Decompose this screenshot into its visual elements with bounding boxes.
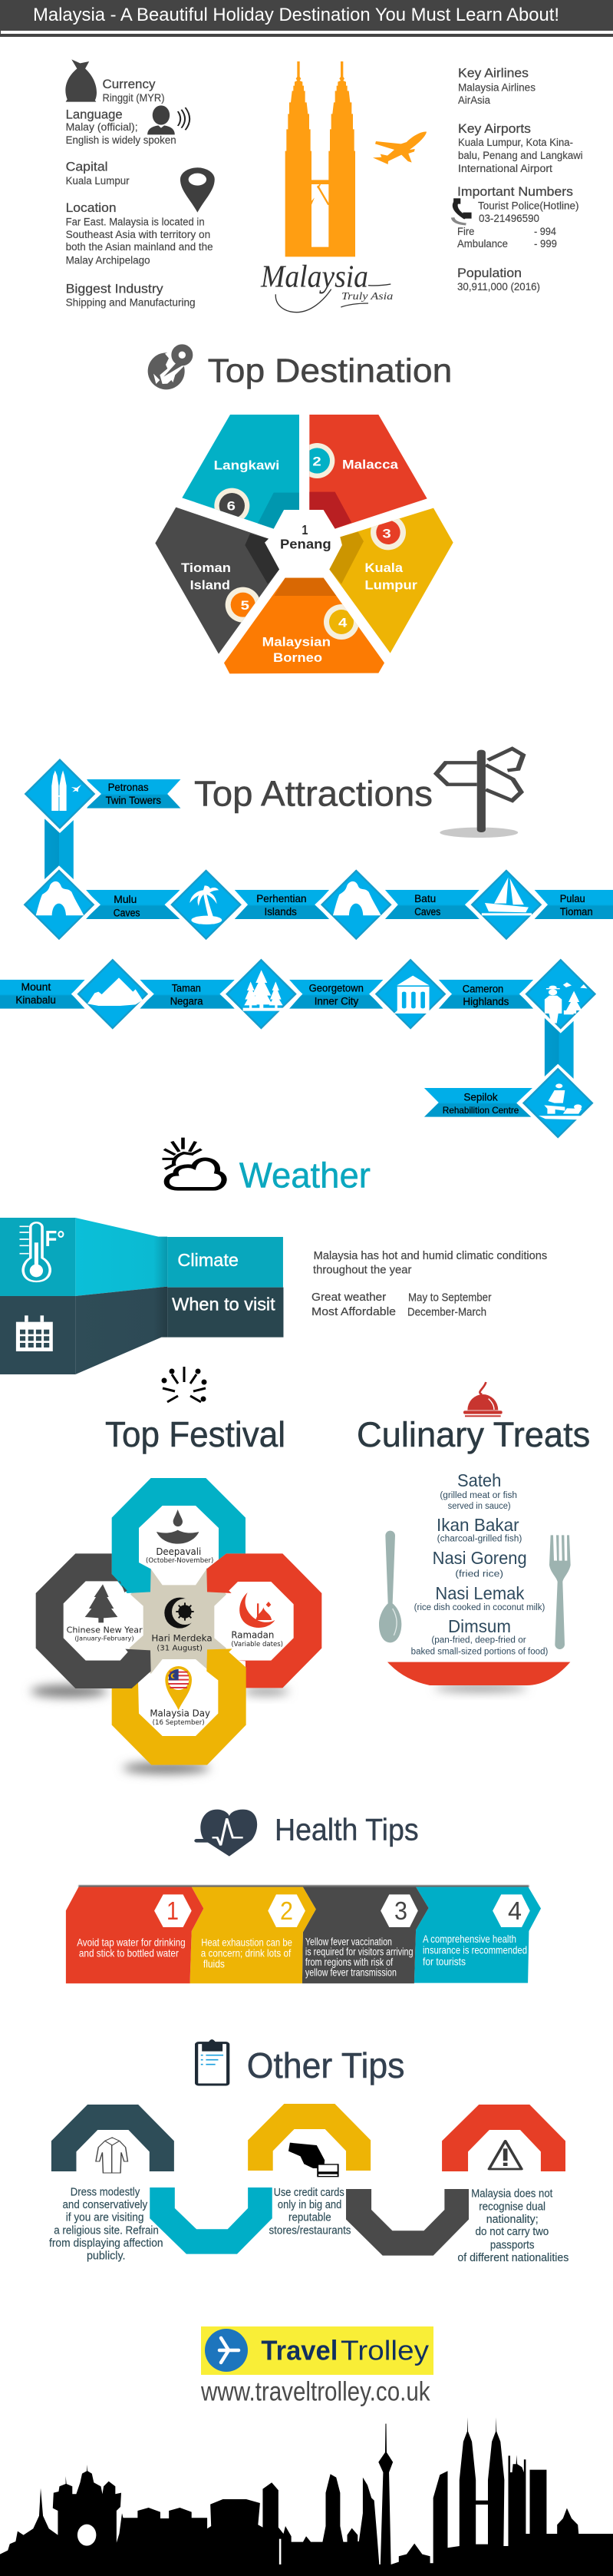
other tip text 3: passports <box>490 2239 534 2251</box>
segment: Langkawi: 6 <box>227 498 236 513</box>
timeline labels row 2: Taman <box>172 982 201 994</box>
timeline labels row 2: Highlands <box>463 996 509 1007</box>
other tip text 2: only in big and <box>278 2199 341 2211</box>
list of dishes: Dimsum <box>448 1616 511 1636</box>
population <box>457 266 540 293</box>
other tip text 2 <box>269 2187 351 2237</box>
segment: Penang centre: Penang <box>280 536 331 551</box>
weather panel labels: Climate <box>177 1250 239 1270</box>
key airports: International Airport <box>458 163 552 174</box>
list of dishes: Ikan Bakar <box>437 1515 519 1535</box>
festival labels: Chinese New Year <box>67 1625 143 1635</box>
health tip text 1: Avoid tap water for drinking <box>77 1936 186 1948</box>
icon: heart with pulse <box>196 1810 257 1857</box>
list of dishes: baked small-sized portions of food) <box>411 1646 548 1657</box>
timeline labels row 2: Rehabilition Centre <box>443 1105 519 1116</box>
u-shape: dark <box>346 2189 469 2256</box>
icon: crescent and star <box>164 1598 198 1629</box>
language <box>66 107 176 146</box>
title: Malaysia - A Beautiful Holiday Destination You Must Learn About! <box>33 5 559 25</box>
capital: Capital <box>66 160 108 174</box>
population: Population <box>457 266 522 280</box>
icon: telephone <box>453 198 472 224</box>
heading: Top Destination <box>208 352 452 389</box>
other tip text 2: reputable <box>288 2212 331 2224</box>
heading: top festival: Top Festival <box>105 1414 285 1454</box>
health tips heading: Health Tips <box>275 1814 419 1847</box>
health tips numbers: 3 <box>394 1896 407 1925</box>
other tip text 1: Dress modestly <box>71 2186 140 2198</box>
weather description text: Most Affordable <box>311 1306 396 1318</box>
weather description text: Malaysia has hot and humid climatic conditions <box>314 1250 547 1262</box>
biggest industry: Shipping and Manufacturing <box>66 296 196 308</box>
diamond: Georgetown Inner City <box>369 955 452 1033</box>
skyline silhouette <box>0 2417 613 2576</box>
health tip text 3 <box>305 1936 413 1978</box>
icon: plane in circle <box>205 2329 248 2372</box>
timeline labels row 2: Cameron <box>463 983 503 994</box>
icon: spoon <box>379 1531 401 1642</box>
travel trolley logo <box>201 2326 433 2375</box>
segment: Malacca <box>299 415 427 529</box>
timeline labels row 1: Batu <box>414 893 436 904</box>
key airlines: Malaysia Airlines <box>458 81 536 93</box>
list of dishes: (fried rice) <box>455 1568 503 1579</box>
weather panel labels: When to visit <box>172 1295 275 1314</box>
segment: Malaysian Borneo <box>224 578 384 673</box>
diamond: Petronas Twin Towers <box>18 755 101 833</box>
icon: money bag <box>65 59 97 102</box>
important numbers: Fire <box>457 226 474 237</box>
segment: Tioman Island <box>155 508 279 654</box>
segment: Tioman Island: 5 <box>241 598 249 613</box>
health tips numbers: 2 <box>280 1896 293 1925</box>
timeline labels row 1: Petronas <box>108 782 149 793</box>
list of dishes: (grilled meat or fish <box>440 1490 517 1500</box>
festival labels <box>67 1546 283 1727</box>
capital <box>66 160 130 187</box>
timeline: attraction route shapes <box>18 755 613 944</box>
icon: pin with malaysian flag <box>165 1666 192 1710</box>
timeline labels row 1 <box>106 782 593 918</box>
health tip text 4: A comprehensive health <box>423 1933 516 1945</box>
red bowl <box>387 1662 570 1685</box>
segment: Langkawi <box>182 415 299 529</box>
malaysia truly asia logo: Truly Asia <box>341 290 394 302</box>
other tip text 2: stores/restaurants <box>269 2224 351 2237</box>
diamond: Taman Negara <box>219 955 302 1033</box>
segment: Penang centre <box>280 522 331 551</box>
language: English is widely spoken <box>66 134 176 146</box>
list of dishes: (charcoal-grilled fish) <box>437 1533 522 1544</box>
timeline labels row 2: Mount <box>21 981 51 993</box>
timeline labels row 1: Caves <box>114 907 140 918</box>
list of dishes: (rice dish cooked in coconut milk) <box>414 1602 545 1612</box>
health tip text 3: Yellow fever vaccination <box>305 1936 392 1948</box>
diamond: Batu Caves <box>315 865 397 944</box>
icon: cloche <box>463 1382 503 1417</box>
ring: Ramadan <box>206 1553 321 1688</box>
list of dishes: Nasi Goreng <box>433 1548 527 1568</box>
key airports: balu, Penang and Langkawi <box>458 150 583 161</box>
panel: key facts left <box>66 77 213 308</box>
icon: sun and cloud <box>162 1138 224 1189</box>
tip 2 <box>190 1887 316 1983</box>
tip 3 <box>302 1887 429 1983</box>
list of dishes: Nasi Lemak <box>435 1583 525 1603</box>
festival labels: Ramadan <box>231 1629 274 1640</box>
important numbers <box>457 184 578 250</box>
timeline: attraction route lower shapes <box>0 955 602 1143</box>
list of dishes <box>411 1470 548 1657</box>
other tip text 3 <box>457 2188 569 2264</box>
icon: hand with card <box>288 2143 338 2177</box>
timeline labels row 1: Perhentian <box>256 893 307 904</box>
important numbers: 03-21496590 <box>479 213 539 224</box>
festival labels: Malaysia Day <box>150 1708 210 1719</box>
other tip text 3: of different nationalities <box>457 2252 569 2264</box>
section: culinary treats <box>357 1382 590 1691</box>
other tip text 2: Use credit cards <box>274 2187 344 2199</box>
biggest industry: Biggest Industry <box>66 282 163 296</box>
timeline labels row 1: Islands <box>264 906 297 918</box>
festival diagram <box>31 1478 321 1774</box>
health tips numbers: 1 <box>166 1896 179 1925</box>
malaysia truly asia logo: Malaysia <box>260 259 368 294</box>
section: top destination <box>148 348 453 673</box>
timeline labels row 2: Inner City <box>315 995 359 1007</box>
language: Language <box>66 107 123 121</box>
currency: Ringgit (MYR) <box>103 92 164 104</box>
health tips numbers <box>166 1896 522 1925</box>
festival labels: (31 August) <box>157 1644 203 1652</box>
location: both the Asian mainland and the <box>66 241 213 253</box>
icon: warning triangle <box>489 2141 522 2169</box>
icon: fireworks <box>163 1367 206 1402</box>
icon: clipboard <box>196 2039 228 2085</box>
segment: Malaysian Borneo: Malaysian <box>262 635 331 650</box>
segment: Kuala Lumpur: 3 <box>382 526 391 541</box>
location: Malay Archipelago <box>66 254 150 266</box>
other tip text 1: and conservatively <box>63 2199 148 2211</box>
key airlines: AirAsia <box>458 94 490 106</box>
festival labels: (Variable dates) <box>231 1641 283 1648</box>
tower opening <box>311 184 328 247</box>
diamond: Sepilok Rehabilitation Centre <box>516 1064 599 1143</box>
segment: Malaysian Borneo: 4 <box>338 616 348 630</box>
festival labels: Deepavali <box>156 1546 201 1557</box>
health tip text 2: fluids <box>203 1958 225 1970</box>
arch: credit cards <box>248 2104 371 2171</box>
icon: thermometer <box>19 1222 50 1281</box>
panel: when to visit fold <box>0 1287 283 1374</box>
header banner <box>0 0 613 37</box>
segment: Malacca: Malacca <box>342 457 399 471</box>
weather heading: Weather <box>239 1156 371 1195</box>
shadow below bowl <box>435 1685 527 1691</box>
currency <box>103 77 164 104</box>
petronas towers <box>285 61 355 256</box>
key airports: Kuala Lumpur, Kota Kina- <box>458 137 573 148</box>
heading: Culinary Treats <box>357 1415 590 1454</box>
list of dishes: served in sauce) <box>448 1500 511 1511</box>
towers, plane and logo <box>260 61 427 312</box>
icon: airplane <box>373 132 427 164</box>
health tip text 4 <box>423 1933 527 1967</box>
timeline labels row 2: Negara <box>170 995 203 1007</box>
key airports <box>458 121 583 174</box>
segment: Penang centre: 1 <box>302 522 308 537</box>
travel trolley logo: Travel <box>261 2334 338 2366</box>
timeline labels row 2: Georgetown <box>309 982 364 994</box>
segment: Langkawi: Langkawi <box>214 458 279 472</box>
important numbers: Tourist Police(Hotline) <box>478 200 578 211</box>
icon: fork <box>549 1535 571 1649</box>
icon: speaking person <box>147 105 190 134</box>
timeline labels row 1: Pulau <box>560 893 585 904</box>
weather description text <box>311 1250 547 1318</box>
festival labels: (October-November) <box>146 1557 213 1565</box>
location: Location <box>66 200 117 215</box>
other tip text 1: if you are visiting <box>66 2212 144 2224</box>
other tip text 3: nationality; <box>486 2214 539 2226</box>
currency: Currency <box>103 77 156 91</box>
location: Southeast Asia with territory on <box>66 229 210 240</box>
weather description text: May to September <box>408 1291 492 1304</box>
health tip text 4: insurance is recommended <box>423 1943 527 1956</box>
health tip text 4: for tourists <box>423 1955 466 1967</box>
health tip text 2: Heat exhaustion can be <box>201 1936 292 1948</box>
list of dishes: Sateh <box>457 1470 501 1490</box>
timeline labels row 2: Sepilok <box>463 1091 498 1103</box>
icon: map pin <box>180 167 215 213</box>
segment: Tioman Island: Tioman <box>181 561 231 575</box>
other tip text 1: publicly. <box>87 2250 126 2263</box>
weather panel labels <box>45 1227 275 1314</box>
timeline labels row 1: Mulu <box>114 894 137 905</box>
location <box>66 200 213 266</box>
timeline labels row 1: Caves <box>414 906 440 918</box>
diamond: Perhentian Islands <box>165 865 248 944</box>
section: top attractions heading: Top Attractions <box>194 773 433 813</box>
intro icons <box>65 59 472 224</box>
other tip text 1 <box>49 2186 163 2263</box>
important numbers: - 994 <box>534 226 556 237</box>
important numbers: - 999 <box>534 238 557 250</box>
other tips heading: Other Tips <box>247 2045 405 2085</box>
timeline labels row 2 <box>15 981 519 1116</box>
other tip text 3: recognise dual <box>479 2201 545 2213</box>
u-shape: teal <box>150 2187 272 2254</box>
capital: Kuala Lumpur <box>66 175 130 187</box>
arch: dress <box>51 2105 174 2171</box>
other tip text 1: from displaying affection <box>49 2237 163 2250</box>
segment: Kuala Lumpur: Kuala <box>364 561 404 575</box>
segment: Kuala Lumpur <box>329 508 453 653</box>
health tip text 3: yellow fever transmission <box>305 1966 397 1978</box>
travel trolley logo: Trolley <box>341 2334 429 2366</box>
segment: Malacca: 2 <box>312 455 321 469</box>
other tip text 3: Malaysia does not <box>471 2188 552 2201</box>
website url: www.traveltrolley.co.uk <box>200 2377 430 2407</box>
segment: Kuala Lumpur: Lumpur <box>364 577 418 592</box>
timeline labels row 2: Kinabalu <box>15 994 56 1006</box>
ring: Chinese New Year <box>36 1553 151 1688</box>
health tip text 3: from regions with risk of <box>305 1956 393 1968</box>
population: 30,911,000 (2016) <box>457 281 540 293</box>
diamond: Pulau Tioman <box>465 865 548 944</box>
diamond: Mount Kinabalu <box>71 955 154 1033</box>
icon: crescent and mosque <box>239 1592 275 1628</box>
ring: Deepavali <box>112 1478 246 1593</box>
language: Malay (official); <box>66 121 138 133</box>
icon: calendar <box>16 1315 53 1351</box>
other tip text 1: a religious site. Refrain <box>54 2224 159 2237</box>
malaysia truly asia logo <box>260 259 394 312</box>
important numbers: Important Numbers <box>457 184 573 199</box>
weather description text: throughout the year <box>313 1264 412 1276</box>
location: Far East. Malaysia is located in <box>66 216 205 227</box>
health tip text 2: a concern; drink lots of <box>201 1946 291 1959</box>
shadow on top of panels <box>78 1885 529 1887</box>
icon: christmas tree <box>85 1584 117 1622</box>
weather panel labels: F° <box>45 1227 65 1252</box>
timeline labels row 1: Twin Towers <box>106 795 161 806</box>
festival labels: Hari Merdeka <box>151 1633 213 1644</box>
festival labels: (16 September) <box>153 1719 205 1727</box>
arch: warning <box>442 2105 565 2171</box>
health tips numbers: 4 <box>508 1896 522 1925</box>
tip 1 <box>66 1887 203 1983</box>
biggest industry <box>66 282 196 308</box>
panel: climate fold <box>0 1218 283 1296</box>
list of dishes: (pan-fried, deep-fried or <box>431 1635 526 1645</box>
icon: shirt <box>96 2138 127 2173</box>
key airlines <box>458 66 536 106</box>
weather description text: December-March <box>407 1306 486 1318</box>
timeline labels row 1: Tioman <box>560 906 593 918</box>
key airports: Key Airports <box>458 121 531 136</box>
tip 4 <box>414 1887 541 1983</box>
diamond: Mulu Caves <box>18 865 101 944</box>
section: other tips graphic <box>51 2039 565 2256</box>
icon: oil lamp <box>157 1510 199 1544</box>
section: weather graphic <box>0 1138 283 1374</box>
section: health tips <box>66 1810 541 1983</box>
health tip text 2 <box>201 1936 292 1970</box>
segment: Tioman Island: Island <box>190 577 230 592</box>
important numbers: Ambulance <box>457 238 508 250</box>
health tip text 3: is required for visitors arriving <box>305 1946 413 1958</box>
icon: globe and pin <box>148 348 190 389</box>
segment: Malaysian Borneo: Borneo <box>273 650 322 665</box>
other tip text 3: do not carry two <box>476 2226 549 2238</box>
key airlines: Key Airlines <box>458 66 529 81</box>
icon: signpost <box>437 749 523 838</box>
festival labels: (January-February) <box>74 1635 134 1642</box>
ring: Malaysia Day <box>112 1648 246 1765</box>
panel: key facts right <box>457 66 583 293</box>
health tip text 1: and stick to bottled water <box>79 1946 179 1959</box>
health tip text 1 <box>77 1936 186 1959</box>
weather description text: Great weather <box>311 1291 386 1304</box>
diamond: Cameron Highlands <box>519 955 602 1033</box>
